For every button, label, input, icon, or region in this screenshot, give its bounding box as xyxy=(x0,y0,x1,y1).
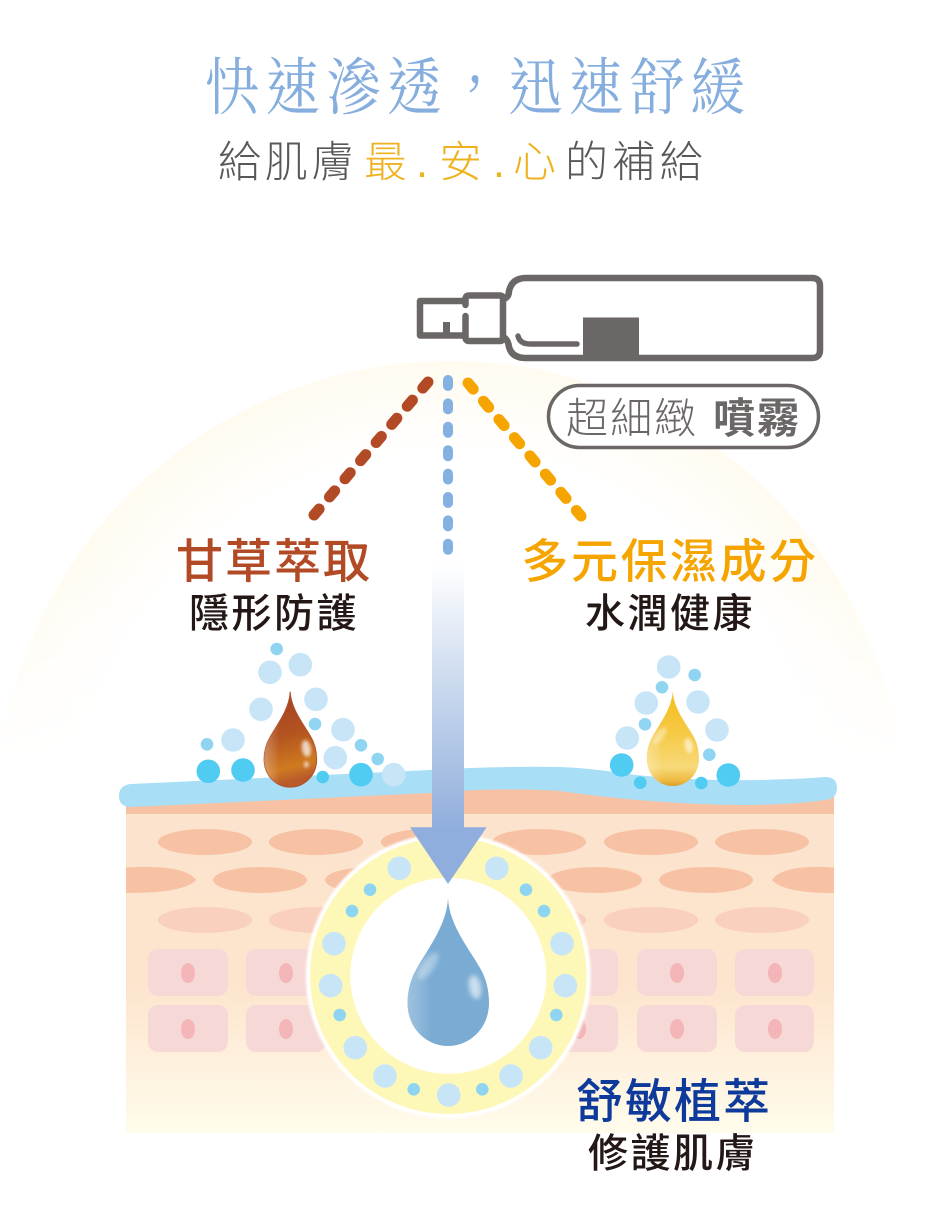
icon: brown drop xyxy=(264,692,317,787)
label: licorice extract: 隱形防護 xyxy=(189,592,359,636)
label: soothing plant extract xyxy=(576,1075,772,1176)
subtitle: 最 xyxy=(364,139,407,187)
subtitle: 給肌膚 xyxy=(218,139,358,187)
icon: blue drop xyxy=(408,898,489,1046)
dashed line: licorice xyxy=(314,382,428,515)
bubbles: right xyxy=(610,655,740,789)
icon: gold drop xyxy=(647,691,699,786)
icon: spray bottle xyxy=(420,278,820,358)
subtitle: . xyxy=(493,139,505,187)
label: licorice extract: 甘草萃取 xyxy=(176,535,372,588)
subtitle: . xyxy=(416,139,428,187)
label: multi moisturising ingredients: 多元保濕成分 xyxy=(522,535,818,588)
background halo xyxy=(0,361,950,1226)
label: ultra-fine spray pill: 超細緻 xyxy=(566,395,699,442)
title: 快速滲透，迅速舒緩 xyxy=(205,54,751,123)
bubbles: left xyxy=(196,643,406,786)
subtitle: 心 xyxy=(513,139,556,187)
lens: soothing extract circle xyxy=(306,833,591,1118)
subtitle: 安 xyxy=(439,139,482,187)
label: ultra-fine spray pill xyxy=(548,386,818,448)
label: multi moisturising ingredients xyxy=(522,535,818,636)
label: soothing plant extract: 修護肌膚 xyxy=(588,1132,758,1176)
subtitle xyxy=(218,139,707,187)
subtitle: 的補給 xyxy=(565,139,707,187)
dashed line: moisture xyxy=(443,380,453,551)
label: multi moisturising ingredients: 水潤健康 xyxy=(585,592,755,636)
arrow: penetration xyxy=(410,565,487,884)
label: soothing plant extract: 舒敏植萃 xyxy=(576,1075,772,1128)
skin layers xyxy=(119,767,837,1133)
label: licorice extract xyxy=(176,535,372,636)
label: ultra-fine spray pill: 噴霧 xyxy=(713,395,801,442)
dashed line: humectants xyxy=(468,383,581,516)
